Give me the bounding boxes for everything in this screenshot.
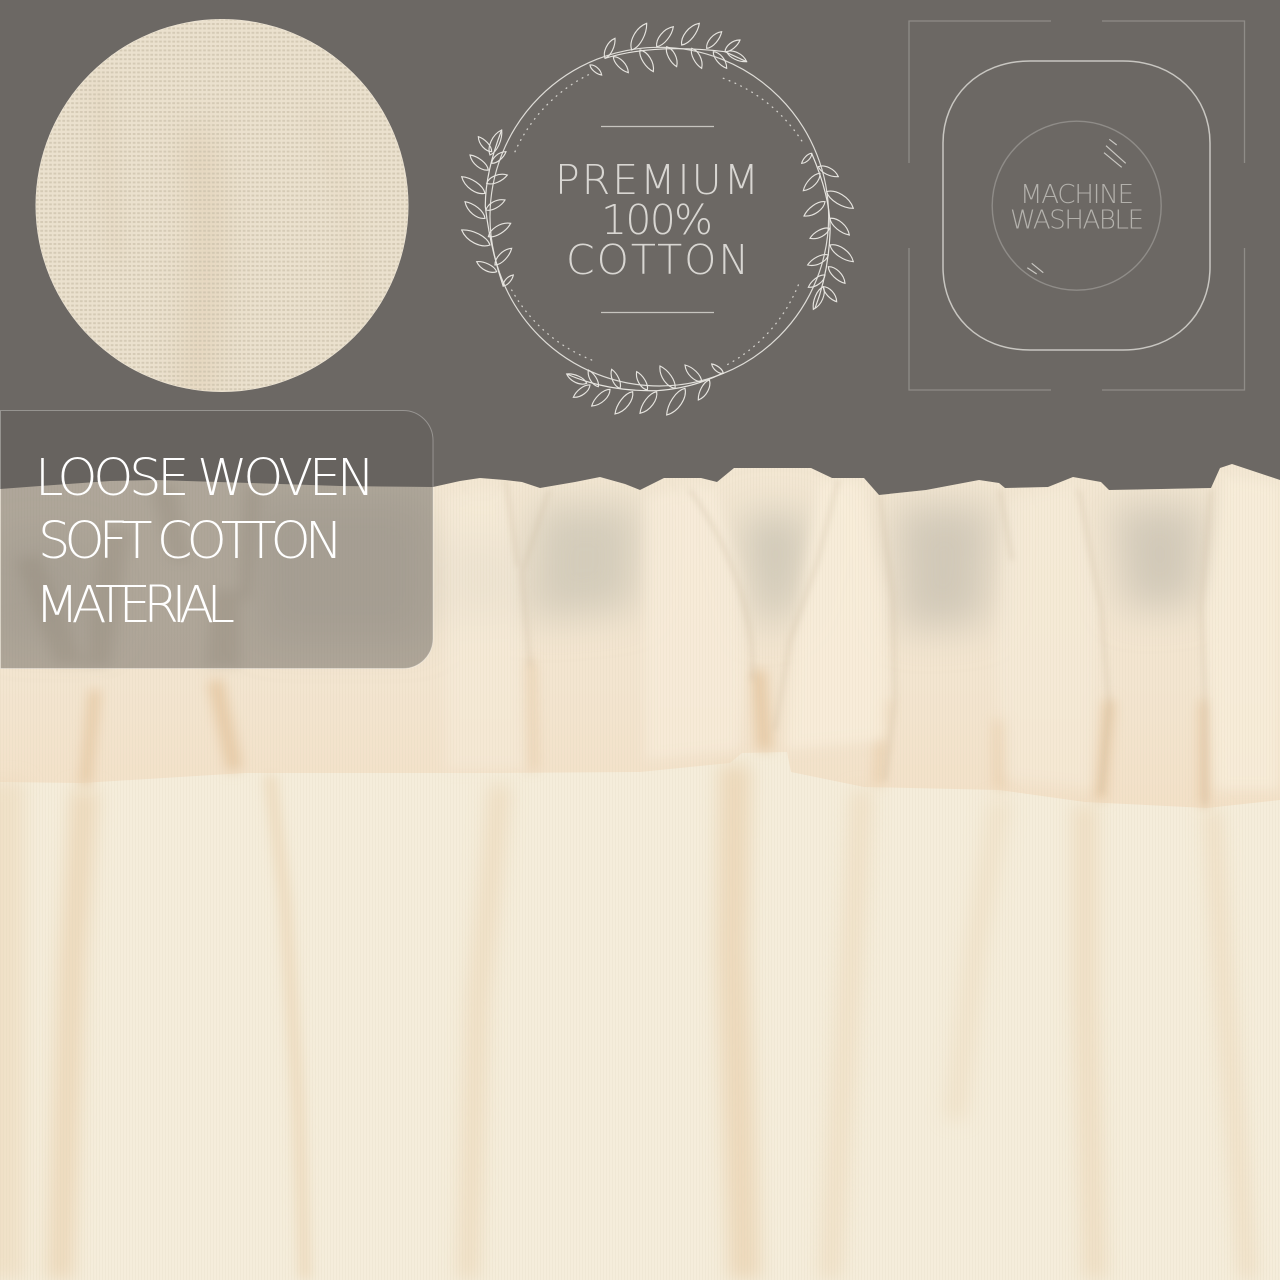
- washable text: MACHINE: [1020, 180, 1134, 210]
- callout text: MATERIAL: [35, 576, 235, 635]
- wreath artwork: [459, 20, 856, 418]
- badge divider lines: [601, 126, 714, 312]
- badge: machine washable: [909, 21, 1244, 390]
- badge text: 100%: [601, 196, 713, 244]
- lower curtain panel below the rod pocket: [0, 752, 1280, 1280]
- pleat highlights: [445, 475, 1280, 790]
- callout text: SOFT COTTON: [38, 512, 343, 571]
- washer body outline: [943, 61, 1210, 350]
- gathered folds behind the callout: [30, 490, 252, 664]
- corner bracket frame: [909, 21, 1244, 390]
- badge text: PREMIUM: [555, 156, 759, 204]
- pleat fold shadows in the gathered rod pocket: [85, 660, 1204, 806]
- washable text: [1010, 180, 1144, 236]
- fabric swatch circle: [30, 15, 415, 400]
- callout text: [35, 449, 375, 635]
- callout: material description: [0, 410, 433, 668]
- translucent callout panel: [0, 410, 433, 668]
- badge text: COTTON: [566, 236, 749, 284]
- badge: premium 100% cotton wreath: [459, 20, 856, 418]
- callout text: LOOSE WOVEN: [35, 449, 375, 508]
- badge text: [555, 156, 759, 284]
- soft fold shadows in the lower curtain: [0, 765, 1248, 1280]
- panel: curtain fabric photo: [0, 460, 1280, 1280]
- door glint marks: [1027, 139, 1126, 274]
- pleat crease lines: [506, 483, 1212, 734]
- washer door circle: [992, 121, 1161, 290]
- washable text: WASHABLE: [1010, 206, 1144, 236]
- sheer see-through areas: [278, 492, 1212, 640]
- fabric rib texture: [0, 460, 1280, 1280]
